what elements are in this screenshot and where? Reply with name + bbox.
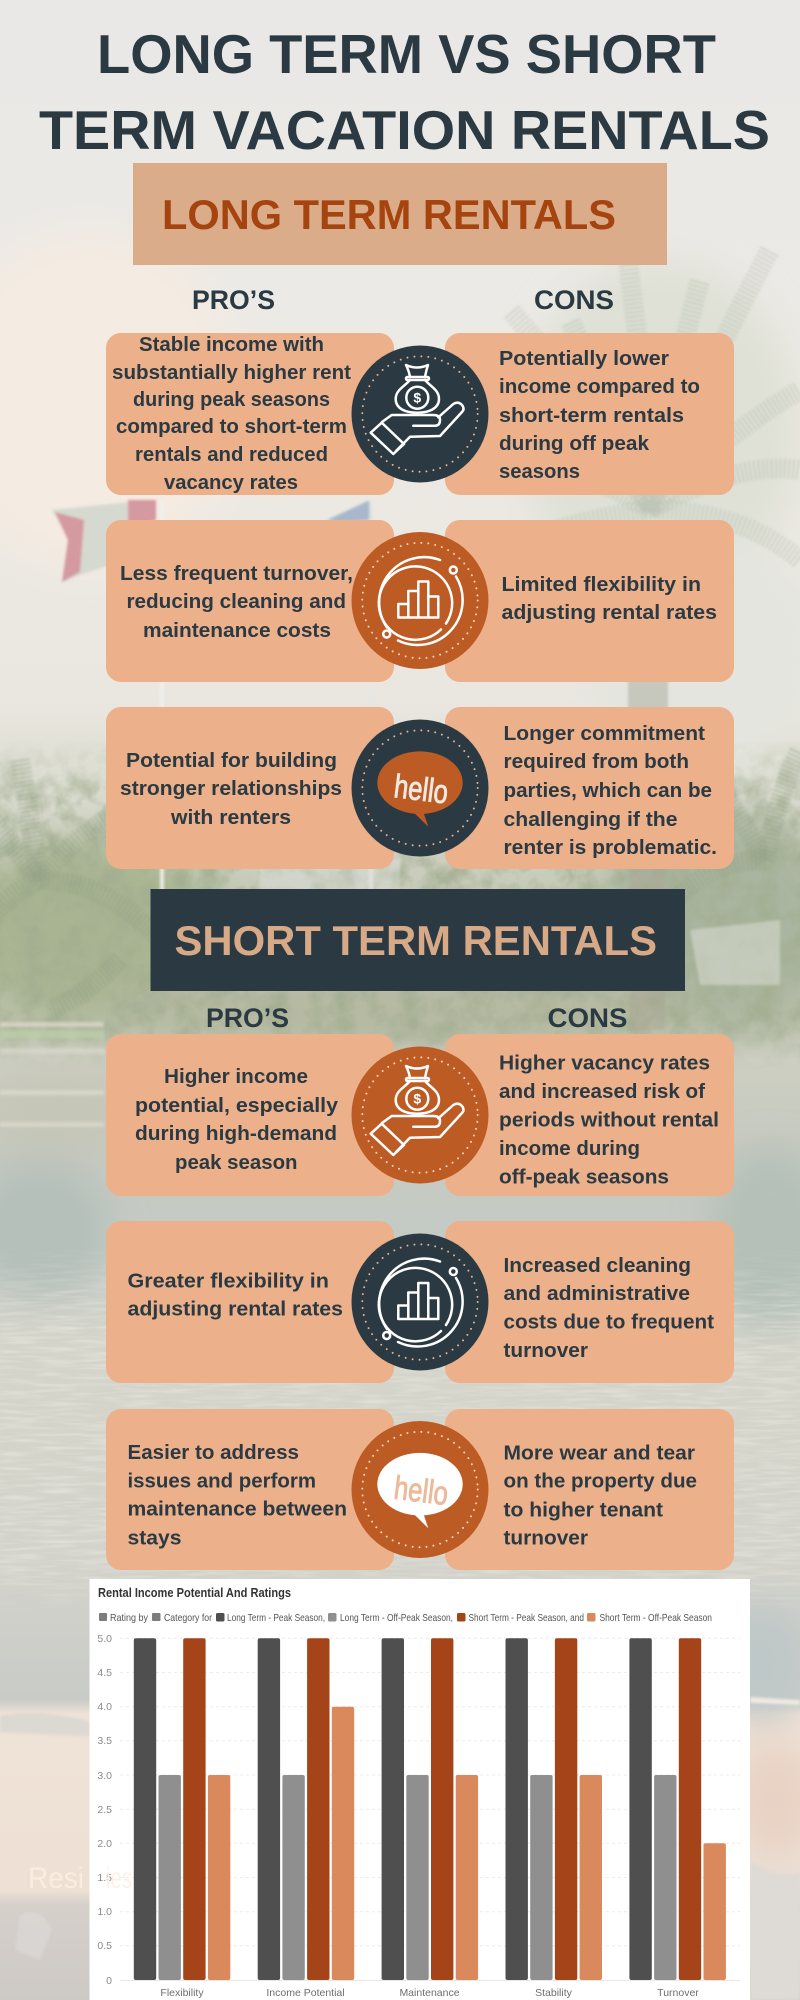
icon: money bag in hand on dark circle: $ <box>413 390 421 406</box>
panel: long term pro 1: compared to short-term <box>116 415 347 438</box>
y axis labels: 1.0 <box>97 1906 112 1918</box>
y axis labels: 4.0 <box>97 1701 112 1713</box>
icon: bar chart in rings on dark circle <box>352 1234 488 1370</box>
panel: short term pro 1: Higher income <box>164 1065 308 1088</box>
panel: short term con 2: turnover <box>504 1339 588 1362</box>
icon: money bag in hand on dark circle <box>352 346 488 482</box>
panel: short term con 3: More wear and tear <box>504 1442 695 1464</box>
panel: long term pro 3: with renters <box>170 806 291 829</box>
bars: income potential <box>258 1638 354 1980</box>
column heading: short term cons: CONS <box>548 1003 628 1033</box>
panel: short term pro 2 <box>106 1221 394 1383</box>
panel: long term pro 1: substantially higher rent <box>112 361 351 384</box>
panel: short term pro 1: peak season <box>175 1151 298 1174</box>
panel: short term pro 2: Greater flexibility in <box>128 1270 329 1292</box>
panel: short term pro 1 <box>106 1034 394 1196</box>
panel: long term con 1: short-term rentals <box>499 404 684 427</box>
panel: long term con 2: Limited flexibility in <box>502 573 701 596</box>
icon: money bag in hand on orange circle <box>352 1046 488 1184</box>
x axis labels: Maintenance <box>399 1987 460 1999</box>
panel: short term pro 3: issues and perform <box>128 1470 316 1493</box>
panel: long term pro 2: Less frequent turnover, <box>120 562 353 585</box>
panel: long term pro 2 <box>106 520 394 682</box>
chart legend: Short Term - Peak Season, and <box>468 1612 584 1624</box>
chart legend: Rating by <box>110 1612 149 1624</box>
x axis labels: Income Potential <box>266 1987 345 1999</box>
panel: short term pro 1: potential, especially <box>135 1094 339 1117</box>
x axis labels <box>160 1987 699 1999</box>
panel: short term pro 3 <box>106 1409 394 1570</box>
main title: LONG TERM VS SHORT <box>97 23 716 85</box>
panel: short term con 1: and increased risk of <box>499 1080 705 1103</box>
panel: short term con 2: Increased cleaning <box>504 1254 691 1277</box>
bar chart: rental income potential and ratings <box>90 1579 750 2000</box>
panel: long term pro 2: reducing cleaning and <box>126 590 346 613</box>
main title: TERM VACATION RENTALS <box>39 99 770 161</box>
chart legend: Short Term - Off-Peak Season <box>600 1612 712 1624</box>
column heading: long term pros: PRO’S <box>192 285 275 315</box>
x axis labels: Stability <box>535 1987 573 1999</box>
chart legend: Long Term - Off-Peak Season, <box>340 1612 453 1624</box>
column heading: long term cons: CONS <box>534 285 614 315</box>
panel: long term pro 1 <box>106 333 394 495</box>
panel: short term con 1: income during <box>499 1137 640 1160</box>
banner: long term rentals <box>133 163 667 265</box>
panel: long term con 2: adjusting rental rates <box>502 601 717 624</box>
chart title: Rental Income Potential And Ratings <box>98 1585 291 1600</box>
panel: long term pro 3: stronger relationships <box>120 777 342 800</box>
panel: long term con 1: Potentially lower <box>499 347 669 370</box>
faint watermark text <box>28 1862 132 1895</box>
y axis labels: 2.5 <box>97 1804 112 1816</box>
panel: short term pro 1: during high-demand <box>135 1122 337 1145</box>
y axis labels: 0.5 <box>97 1940 112 1952</box>
x axis labels: Turnover <box>657 1987 699 1999</box>
panel: short term con 3: on the property due <box>504 1470 697 1493</box>
y axis labels: 3.5 <box>97 1735 112 1747</box>
panel: long term pro 1: rentals and reduced <box>135 443 328 466</box>
panel: long term con 1: income compared to <box>499 375 700 398</box>
panel: long term pro 3 <box>106 707 394 869</box>
panel: short term con 1: periods without rental <box>499 1108 719 1132</box>
panel: short term pro 2: adjusting rental rates <box>128 1298 343 1321</box>
panel: short term con 2 <box>445 1221 734 1383</box>
banner: short term rentals: SHORT TERM RENTALS <box>174 917 657 964</box>
icon: money bag in hand on orange circle: $ <box>413 1090 421 1106</box>
faint watermark text: ies <box>106 1862 132 1895</box>
panel: short term con 3: to higher tenant <box>504 1498 663 1522</box>
column heading: short term pros: PRO’S <box>206 1003 289 1033</box>
panel: long term con 3: parties, which can be <box>504 779 712 802</box>
banner: short term rentals <box>150 889 685 991</box>
panel: long term con 3: renter is problematic. <box>504 836 717 859</box>
panel: short term pro 3: stays <box>128 1527 182 1550</box>
panel: long term pro 2: maintenance costs <box>143 619 331 642</box>
panel: long term pro 1: during peak seasons <box>133 388 330 411</box>
panel: long term con 3: required from both <box>504 750 689 773</box>
faint watermark text: Resi <box>28 1862 84 1895</box>
y axis labels: 3.0 <box>97 1770 112 1782</box>
x axis labels: Flexibility <box>160 1987 204 1999</box>
banner: long term rentals: LONG TERM RENTALS <box>162 191 616 238</box>
panel: short term pro 3: maintenance between <box>128 1498 347 1521</box>
chart legend: Long Term - Peak Season, <box>227 1612 325 1624</box>
chart legend <box>99 1612 712 1624</box>
y axis labels: 1.5 <box>97 1872 112 1884</box>
panel: long term con 1: seasons <box>499 460 580 483</box>
y axis labels: 0 <box>106 1975 112 1987</box>
panel: short term con 3 <box>445 1409 734 1570</box>
y axis labels: 4.5 <box>97 1667 112 1679</box>
panel: short term pro 3: Easier to address <box>128 1441 299 1464</box>
panel: long term pro 1: vacancy rates <box>164 471 298 494</box>
main title <box>39 23 770 161</box>
panel: short term con 2: costs due to frequent <box>504 1310 714 1334</box>
icon: hello speech bubble on orange circle: hello <box>392 1469 450 1512</box>
bars: stability <box>506 1638 602 1980</box>
icon: hello speech bubble on dark circle <box>352 720 488 856</box>
bars: turnover <box>629 1638 726 1980</box>
y axis labels: 2.0 <box>97 1838 112 1850</box>
y axis labels <box>97 1633 112 1987</box>
panel: long term pro 3: Potential for building <box>126 749 337 772</box>
panel: short term con 1: off-peak seasons <box>499 1166 669 1188</box>
panel: long term con 2 <box>445 520 734 682</box>
bars: flexibility <box>134 1638 230 1980</box>
panel: short term con 1: Higher vacancy rates <box>499 1052 710 1074</box>
panel: long term con 3 <box>445 707 734 869</box>
panel: long term con 3: challenging if the <box>504 808 678 831</box>
panel: long term con 1: during off peak <box>499 432 650 455</box>
panel: short term con 1 <box>445 1034 734 1196</box>
chart legend: Category for <box>164 1612 212 1624</box>
y axis labels: 5.0 <box>97 1633 112 1645</box>
panel: short term con 3: turnover <box>504 1527 588 1550</box>
icon: hello speech bubble on dark circle: hello <box>392 767 450 811</box>
panel: long term con 3: Longer commitment <box>504 722 705 745</box>
icon: bar chart in rings on orange circle <box>352 532 488 669</box>
bars: maintenance <box>382 1638 478 1980</box>
panel: long term pro 1: Stable income with <box>139 333 324 356</box>
panel: short term con 2: and administrative <box>504 1282 690 1305</box>
panel: long term con 1 <box>445 333 734 495</box>
icon: hello speech bubble on orange circle <box>352 1421 488 1558</box>
